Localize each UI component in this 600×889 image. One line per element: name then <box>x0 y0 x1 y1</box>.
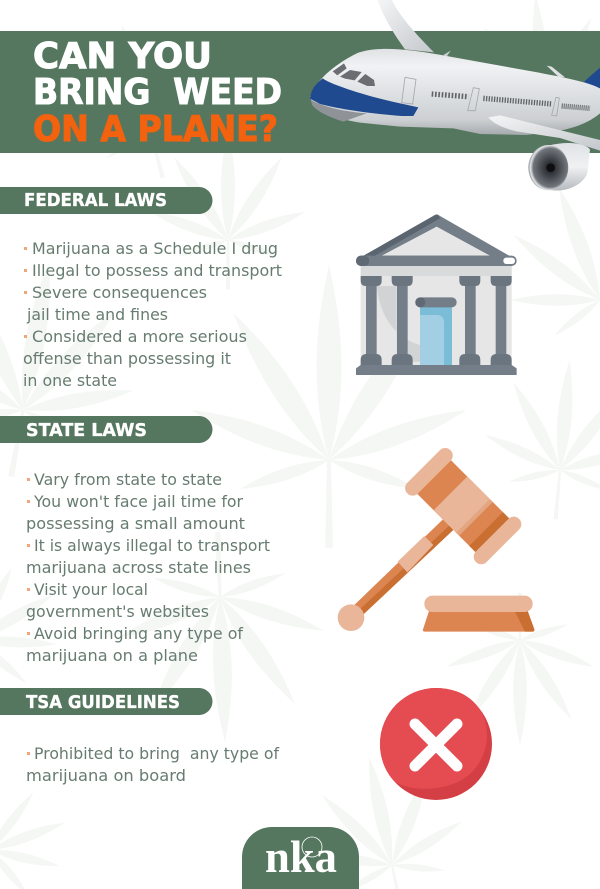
federal laws text: Marijuana as a Schedule I drug <box>32 239 278 258</box>
section header: state laws <box>0 416 212 443</box>
tsa guidelines text: Prohibited to bring any type of <box>34 744 279 763</box>
logo badge: nka <box>265 831 337 882</box>
title <box>33 36 282 150</box>
state laws text: Vary from state to state <box>34 470 222 489</box>
section header: tsa guidelines <box>0 688 212 715</box>
blue nose stripe <box>310 78 418 116</box>
tsa guidelines text: marijuana on board <box>26 766 186 785</box>
tsa guidelines text <box>26 744 279 785</box>
federal laws text: in one state <box>23 371 117 390</box>
fuselage <box>310 49 600 135</box>
gavel head <box>402 445 524 567</box>
logo badge <box>242 827 359 889</box>
federal laws text: Considered a more serious <box>32 327 247 346</box>
title banner <box>0 31 600 153</box>
cockpit windows <box>333 63 375 86</box>
title: BRING WEED <box>33 72 282 113</box>
state laws text: You won't face jail time for <box>33 492 243 511</box>
passenger windows <box>432 94 590 108</box>
airplane illustration <box>310 0 600 190</box>
tail fins <box>443 51 600 92</box>
section header: federal laws <box>0 187 212 214</box>
state laws text: Avoid bringing any type of <box>34 624 243 643</box>
icon: government building <box>356 214 517 375</box>
sound block <box>423 596 534 632</box>
engine <box>528 143 590 190</box>
cabin doors <box>402 77 559 116</box>
state laws text: Visit your local <box>34 580 148 599</box>
federal laws text: Severe consequences <box>32 283 207 302</box>
federal laws text: offense than possessing it <box>23 349 231 368</box>
federal laws text: jail time and fines <box>26 305 168 324</box>
state laws text: marijuana on a plane <box>26 646 198 665</box>
upper wing <box>377 0 434 52</box>
section header: state laws: STATE LAWS <box>26 421 147 441</box>
state laws text: It is always illegal to transport <box>34 536 270 555</box>
grey nose underside <box>311 99 367 122</box>
state laws text: government's websites <box>26 602 209 621</box>
title: ON A PLANE? <box>33 109 278 150</box>
title: CAN YOU <box>33 36 212 77</box>
section header: federal laws: FEDERAL LAWS <box>24 191 167 211</box>
state laws text: marijuana across state lines <box>26 558 251 577</box>
state laws text: possessing a small amount <box>26 514 245 533</box>
federal laws text: Illegal to possess and transport <box>32 261 282 280</box>
state laws text <box>26 470 270 665</box>
lower wing <box>488 115 600 151</box>
federal laws text <box>23 239 282 390</box>
icon: gavel <box>338 445 534 632</box>
gavel handle <box>338 517 456 631</box>
icon: red prohibited cross <box>380 688 492 800</box>
section header: tsa guidelines: TSA GUIDELINES <box>26 693 180 713</box>
